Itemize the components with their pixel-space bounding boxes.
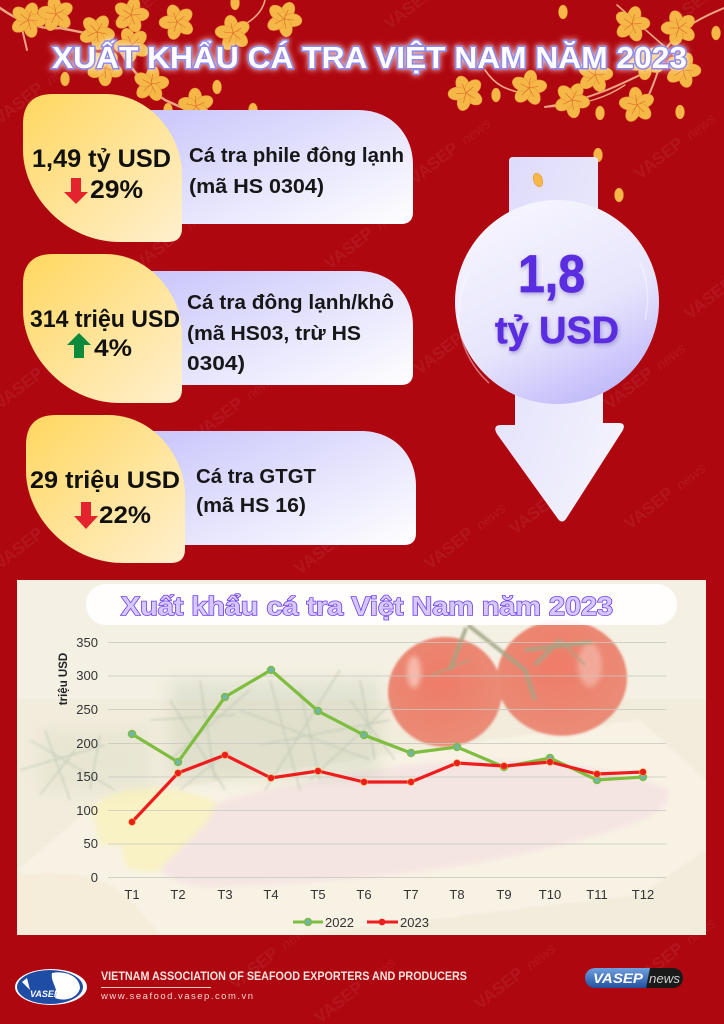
footer badge: VASEP news: VASEP xyxy=(593,970,644,986)
panel: frozen fillet xyxy=(23,94,413,242)
y axis labels: 50 xyxy=(84,836,98,851)
value leaf xyxy=(23,94,182,242)
blossom branches and flowers xyxy=(0,0,724,162)
y axis labels: 100 xyxy=(76,803,98,818)
description: Cá tra đông lạnh/khô xyxy=(187,292,394,314)
footer badge: VASEP news xyxy=(585,968,683,988)
footer logo: VASEP: VASEP xyxy=(30,989,61,999)
footer logo: VASEP xyxy=(15,969,87,1005)
x axis labels: T11 xyxy=(586,887,608,902)
gridlines xyxy=(108,642,666,878)
panel: frozen/dried xyxy=(23,254,413,403)
x axis labels: T12 xyxy=(632,887,654,902)
y axis labels: 300 xyxy=(76,668,98,683)
change text: 29% xyxy=(90,176,143,204)
footer organisation: www.seafood.vasep.com.vn xyxy=(100,991,253,1002)
panel: value added xyxy=(26,415,416,563)
total unit: tỷ USD xyxy=(495,310,619,352)
change text: 4% xyxy=(94,335,132,362)
petals over arrow xyxy=(531,172,624,202)
value leaf xyxy=(26,415,185,563)
footer organisation: VIETNAM ASSOCIATION OF SEAFOOD EXPORTERS AND PRODUCERS xyxy=(101,969,467,983)
panel: chart xyxy=(17,580,706,935)
title: XUẤT KHẨU CÁ TRA VIỆT NAM NĂM 2023 xyxy=(52,39,687,75)
y axis labels xyxy=(76,635,98,885)
icon: down arrow xyxy=(64,178,88,204)
x axis labels: T2 xyxy=(170,887,186,902)
legend xyxy=(293,915,429,930)
label card xyxy=(150,110,413,224)
description: Cá tra GTGT xyxy=(196,466,316,488)
x axis labels xyxy=(124,887,654,902)
description: (mã HS03, trừ HS xyxy=(187,323,361,345)
chart title pill xyxy=(86,584,677,625)
line: 2022 xyxy=(128,666,646,784)
description: Cá tra phile đông lạnh xyxy=(189,145,404,167)
y axis labels: 250 xyxy=(76,702,98,717)
footer badge: VASEP news: news xyxy=(649,971,680,986)
value text: 314 triệu USD xyxy=(30,306,180,333)
total value: 1,8 xyxy=(518,245,585,304)
legend: 2022 xyxy=(325,915,354,930)
x axis labels: T5 xyxy=(310,887,326,902)
title: XUẤT KHẨU CÁ TRA VIỆT NAM NĂM 2023 xyxy=(52,39,687,75)
line: 2023 xyxy=(129,752,646,825)
label card xyxy=(150,271,413,385)
y axis labels: 0 xyxy=(91,870,98,885)
y axis title: triệu USD xyxy=(58,653,70,705)
change text: 22% xyxy=(99,502,151,529)
chart title: Xuất khẩu cá tra Việt Nam năm 2023 xyxy=(121,591,613,621)
y axis labels: 150 xyxy=(76,769,98,784)
x axis labels: T9 xyxy=(496,887,512,902)
description: 0304) xyxy=(187,353,245,375)
value leaf xyxy=(23,254,182,403)
value text: 29 triệu USD xyxy=(30,467,180,494)
y axis labels: 350 xyxy=(76,635,98,650)
icon: up arrow xyxy=(67,333,91,358)
x axis labels: T3 xyxy=(217,887,233,902)
x axis labels: T8 xyxy=(449,887,465,902)
circle xyxy=(455,200,659,404)
legend: 2023 xyxy=(400,915,429,930)
icon: down arrow xyxy=(74,502,98,529)
x axis labels: T10 xyxy=(539,887,561,902)
arrow body xyxy=(495,157,624,522)
chart photo background xyxy=(17,580,706,935)
footer organisation xyxy=(100,969,467,1002)
label card xyxy=(153,431,416,545)
x axis labels: T4 xyxy=(263,887,279,902)
y axis labels: 200 xyxy=(76,736,98,751)
description: (mã HS 16) xyxy=(196,495,306,517)
x axis labels: T7 xyxy=(403,887,419,902)
description: (mã HS 0304) xyxy=(189,176,324,198)
value text: 1,49 tỷ USD xyxy=(32,145,171,173)
total value arrow xyxy=(455,157,659,522)
x axis labels: T1 xyxy=(124,887,140,902)
x axis labels: T6 xyxy=(356,887,372,902)
